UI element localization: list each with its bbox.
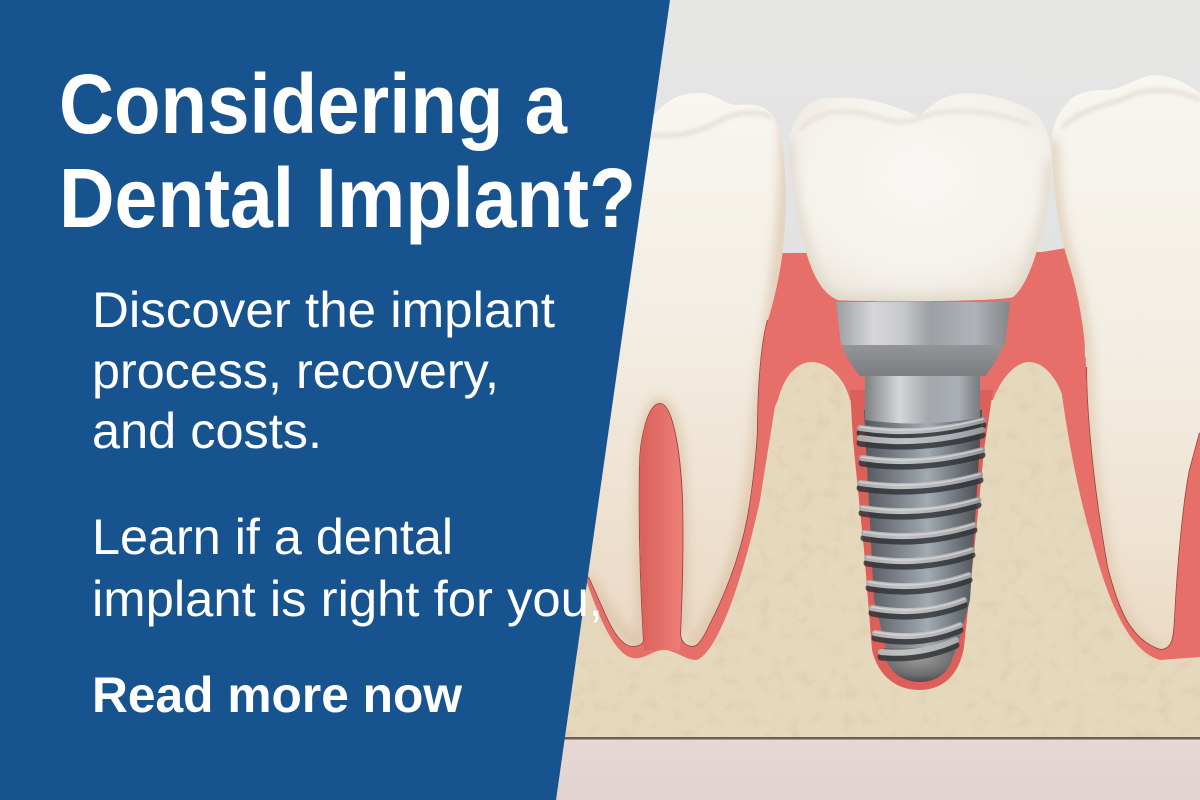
call to action: Read more now <box>92 667 462 723</box>
left natural tooth <box>588 93 786 647</box>
intro paragraph: Discover the implant <box>92 282 555 338</box>
implant collar <box>836 302 1010 345</box>
implant screw body <box>864 410 982 655</box>
implant crown <box>789 93 1051 301</box>
implant rounded tip <box>884 648 954 682</box>
intro paragraph <box>92 282 555 459</box>
second paragraph: implant is right for you, <box>92 571 603 627</box>
title: Dental Implant? <box>59 151 636 245</box>
title: Considering a <box>59 57 568 151</box>
second paragraph: Learn if a dental <box>92 509 453 565</box>
blue text panel <box>0 0 670 800</box>
gum socket around implant <box>850 390 993 690</box>
intro paragraph: process, recovery, <box>92 343 499 399</box>
gum around left tooth <box>500 300 776 660</box>
implant threads <box>860 419 983 658</box>
floor surface <box>540 738 1200 800</box>
implant shaft <box>865 374 980 424</box>
jaw bone <box>540 362 1200 740</box>
right natural tooth <box>1052 75 1200 650</box>
dental implant <box>836 302 1010 682</box>
background wall <box>540 0 1200 400</box>
intro paragraph: and costs. <box>92 403 322 459</box>
gum around right tooth <box>1062 300 1200 660</box>
title <box>59 57 636 245</box>
second paragraph <box>92 509 603 627</box>
upper gum tissue <box>760 248 1086 420</box>
implant collar lower taper <box>841 343 1004 376</box>
gum slot between left roots <box>640 404 682 650</box>
